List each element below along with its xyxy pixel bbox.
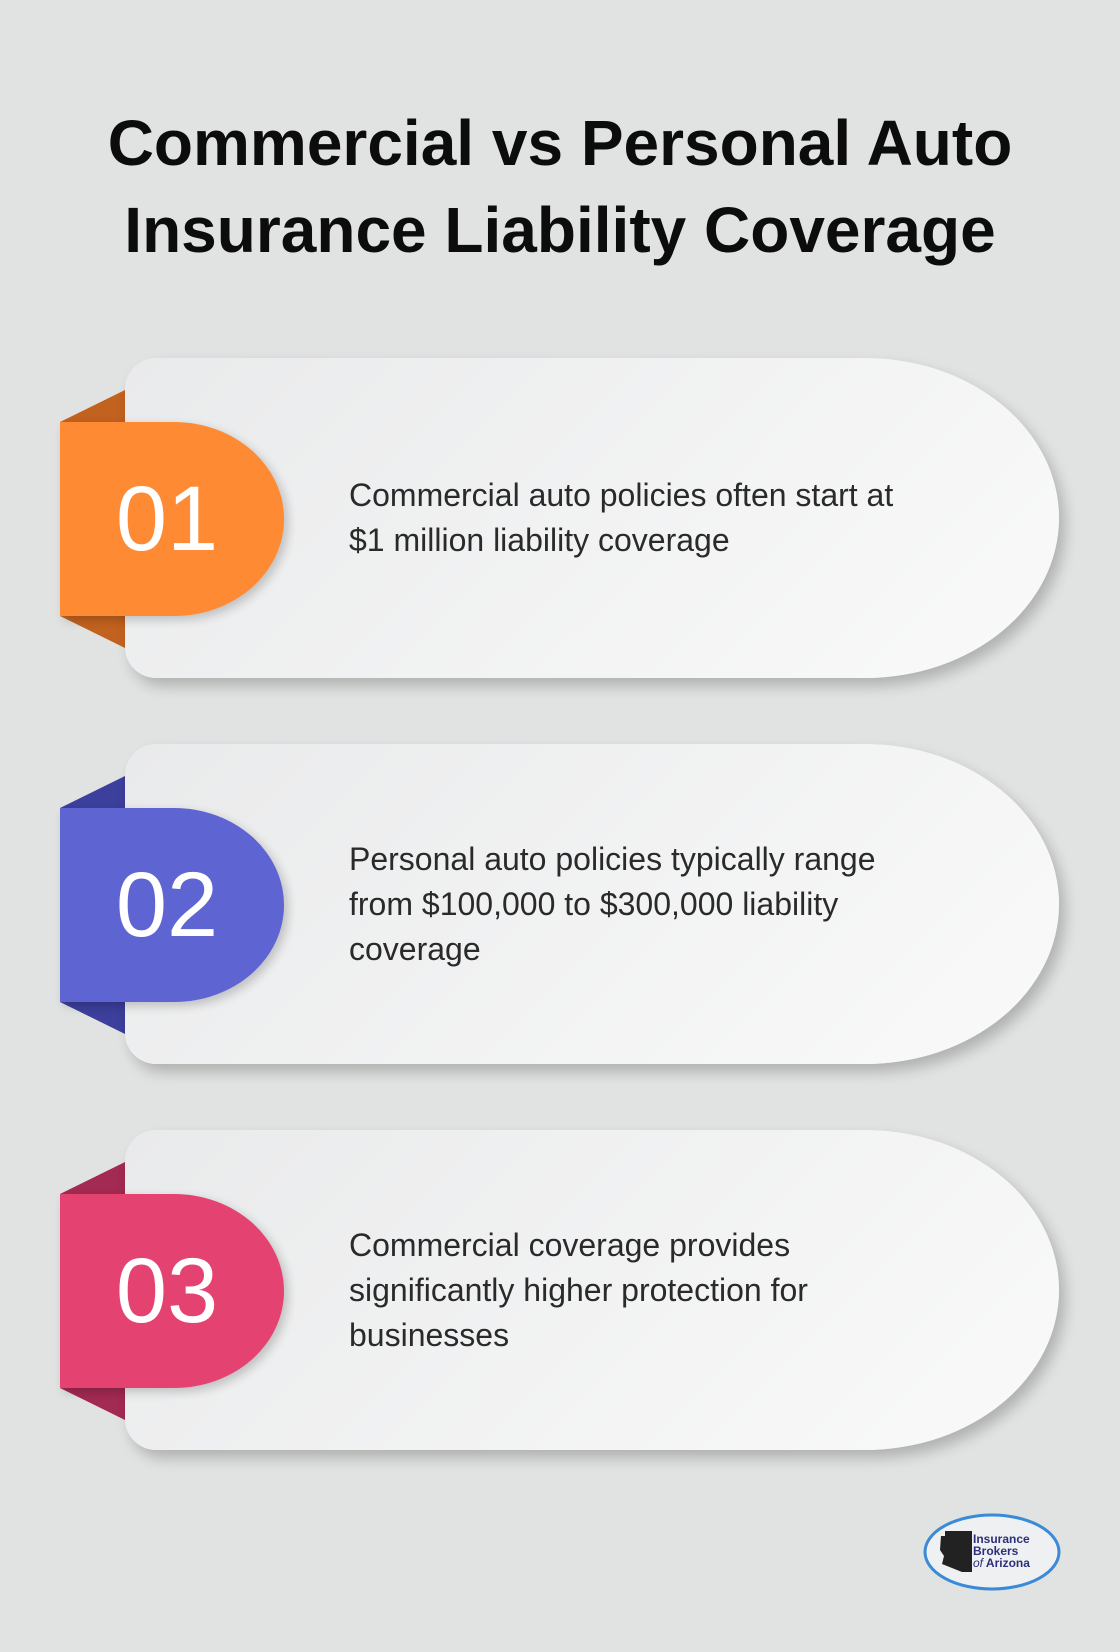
badge 03 bbox=[60, 1194, 284, 1388]
text 01: Commercial auto policies often start at bbox=[349, 477, 893, 513]
fold bottom 01 bbox=[60, 616, 125, 648]
fold top 03 bbox=[60, 1162, 125, 1194]
text 02 bbox=[349, 840, 876, 966]
logo: of Arizona bbox=[973, 1556, 1030, 1570]
badge 01 bbox=[60, 422, 284, 616]
badge 03: 03 bbox=[116, 1240, 218, 1342]
badge 02 bbox=[60, 808, 284, 1002]
text 03 bbox=[349, 1226, 808, 1352]
badge 01: 01 bbox=[116, 468, 218, 570]
logo: Brokers bbox=[973, 1544, 1019, 1558]
fold top 01 bbox=[60, 390, 125, 422]
card 01 bbox=[125, 358, 1059, 678]
panel: item 01 bbox=[60, 358, 1071, 692]
text 02: Personal auto policies typically range bbox=[349, 840, 876, 876]
title bbox=[108, 107, 1012, 266]
text 02: from $100,000 to $300,000 liability bbox=[349, 886, 838, 922]
text 02: coverage bbox=[349, 930, 481, 966]
title: Commercial vs Personal Auto bbox=[108, 107, 1012, 179]
badge 02: 02 bbox=[116, 854, 218, 956]
logo: Insurance bbox=[973, 1532, 1030, 1546]
text 01: $1 million liability coverage bbox=[349, 522, 730, 558]
card 03 bbox=[125, 1130, 1059, 1450]
text 01 bbox=[349, 477, 894, 558]
title: Insurance Liability Coverage bbox=[124, 194, 996, 266]
text 03: Commercial coverage provides bbox=[349, 1226, 790, 1262]
panel: item 02 bbox=[60, 744, 1071, 1078]
logo bbox=[924, 1514, 1060, 1590]
fold bottom 03 bbox=[60, 1388, 125, 1420]
card 02 bbox=[125, 744, 1059, 1064]
fold bottom 02 bbox=[60, 1002, 125, 1034]
text 03: businesses bbox=[349, 1316, 509, 1352]
text 03: significantly higher protection for bbox=[349, 1272, 808, 1308]
fold top 02 bbox=[60, 776, 125, 808]
panel: item 03 bbox=[60, 1130, 1071, 1464]
